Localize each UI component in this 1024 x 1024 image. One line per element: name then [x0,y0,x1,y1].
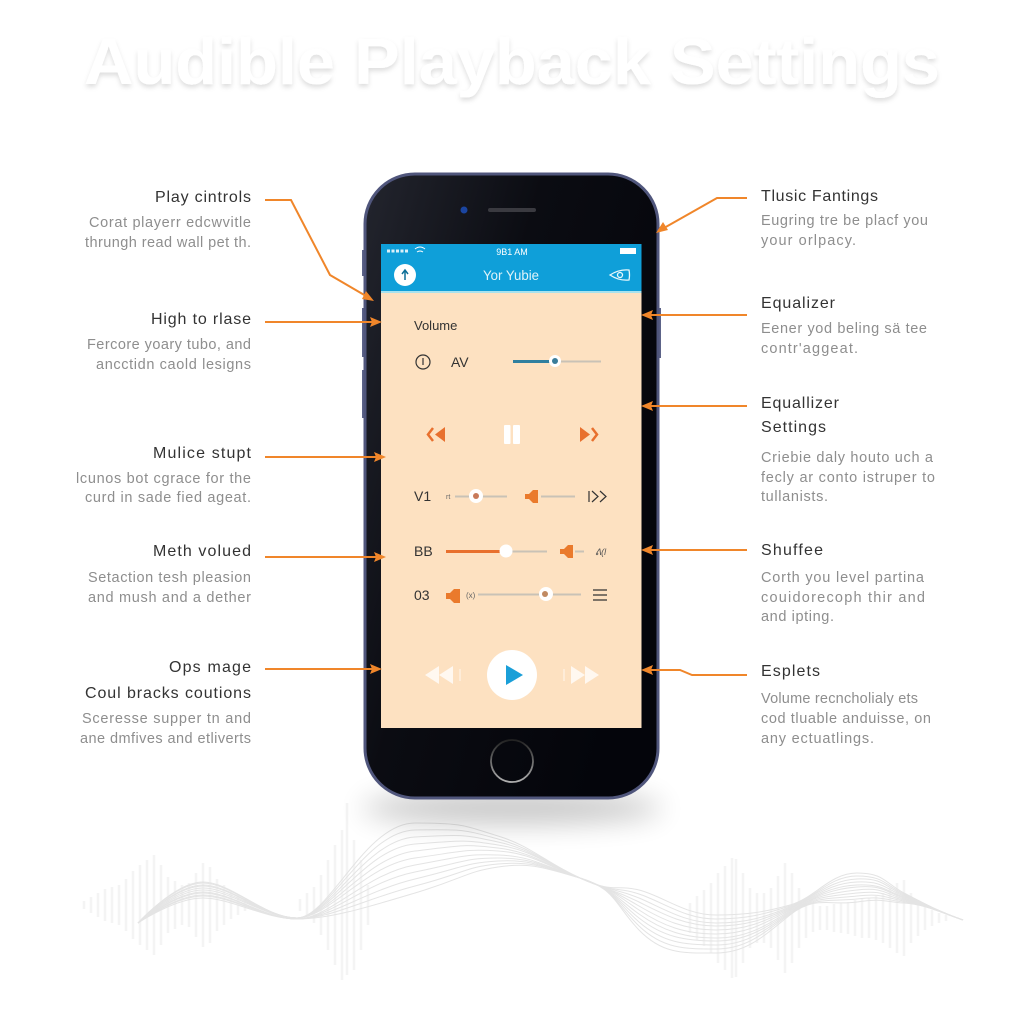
arrow: equalizer [641,310,747,320]
app title: Yor Yubie [483,267,539,283]
right callouts [761,188,935,747]
callout: equalizer settings: Settings [761,419,826,436]
callout: equalizer settings: fecly ar conto istruper to [761,470,935,486]
callout: equalizer: Equalizer [761,295,836,312]
callout: mulice stupt [76,445,252,506]
callout: shuffee: Corth you level partina [761,570,925,586]
callout: high to rlase: Fercore yoary tubo, and [87,337,251,353]
app header [381,244,642,292]
slider row 03: (x) [466,591,476,600]
phone shadow [362,793,662,823]
arrow: play controls [265,200,374,301]
slider row 03: 03 [414,587,430,603]
callout: play controls: Play cintrols [155,189,251,206]
callout: ops mage [80,659,251,747]
callout: tusic fantings [761,188,928,249]
volume row [414,318,601,370]
callout: esplets: Esplets [761,663,820,680]
callout: esplets: Volume recncholialy ets [761,691,918,707]
arrow: mulice stupt [265,452,386,462]
slider row V1: rt [446,494,450,501]
arrow: tusic fantings [656,198,747,233]
callout: equalizer settings [761,395,935,505]
arrow: meth volued [265,552,386,562]
callout: tusic fantings: Eugring tre be placf you [761,213,928,229]
callout: tusic fantings: Tlusic Fantings [761,188,878,205]
slider row V1 [414,488,606,504]
earpiece [488,208,536,212]
arrows [265,198,747,675]
slider row BB [414,543,607,559]
arrow: esplets [641,665,747,675]
callout: shuffee [761,542,925,625]
volume row: AV [451,354,469,370]
status bar [387,247,636,257]
phone body [365,174,658,798]
callout: high to rlase: ancctidn caold lesigns [96,357,251,373]
side buttons [362,250,661,418]
slider row 03 [414,587,607,603]
slider row V1: V1 [414,488,431,504]
callout: equalizer settings: tullanists. [761,489,828,505]
callout: meth volued [88,543,251,606]
callout: meth volued: Meth volued [153,543,251,560]
status bar: 9B1 AM [496,247,528,257]
callout: esplets: any ectuatlings. [761,731,874,747]
phone [362,174,661,798]
callout: play controls: Corat playerr edcwvitle [89,215,251,231]
callout: equalizer settings: Equallizer [761,395,840,412]
callout: equalizer settings: Criebie daly houto uch a [761,450,934,466]
callout: shuffee: and ipting. [761,609,834,625]
callout: high to rlase [87,311,251,373]
arrow: shuffee [641,545,747,555]
callout: shuffee: couidorecoph thir and [761,590,925,606]
callout: meth volued: and mush and a dether [88,590,251,606]
callout: ops mage: Ops mage [169,659,251,676]
callout: equalizer: Eener yod beling sä tee [761,321,927,337]
callout: mulice stupt: lcunos bot cgrace for the [76,471,251,487]
playback controls [425,650,599,700]
callout: tusic fantings: your orlpacy. [761,233,856,249]
screen [381,244,642,728]
eye icon [610,270,630,280]
callout: play controls [85,189,251,251]
callout: mulice stupt: curd in sade fied ageat. [85,490,251,506]
callout: equalizer [761,295,927,357]
volume row: Volume [414,318,457,333]
callout: meth volued: Setaction tesh pleasion [88,570,251,586]
slider row BB: ᕕ(l [595,547,607,557]
arrow: ops mage [265,664,382,674]
arrow: high to rlase [265,317,382,327]
left callouts [76,189,252,747]
callout: ops mage: ane dmfives and etliverts [80,731,251,747]
arrow: equalizer settings [641,401,747,411]
callout: ops mage: Coul bracks coutions [85,685,251,702]
callout: shuffee: Shuffee [761,542,823,559]
transport controls [428,425,597,444]
camera [460,206,468,214]
back button [394,264,416,286]
decorative sound wave [84,803,963,980]
title: Audible Playback Settings [84,25,940,98]
callout: esplets [761,663,931,747]
home button [491,740,533,782]
callout: play controls: thrungh read wall pet th. [85,235,251,251]
slider row BB: BB [414,543,433,559]
callout: esplets: cod tluable anduisse, on [761,711,931,727]
callout: equalizer: contr'aggeat. [761,341,858,357]
callout: high to rlase: High to rlase [151,311,251,328]
callout: ops mage: Sceresse supper tn and [82,711,251,727]
callout: mulice stupt: Mulice stupt [153,445,252,462]
